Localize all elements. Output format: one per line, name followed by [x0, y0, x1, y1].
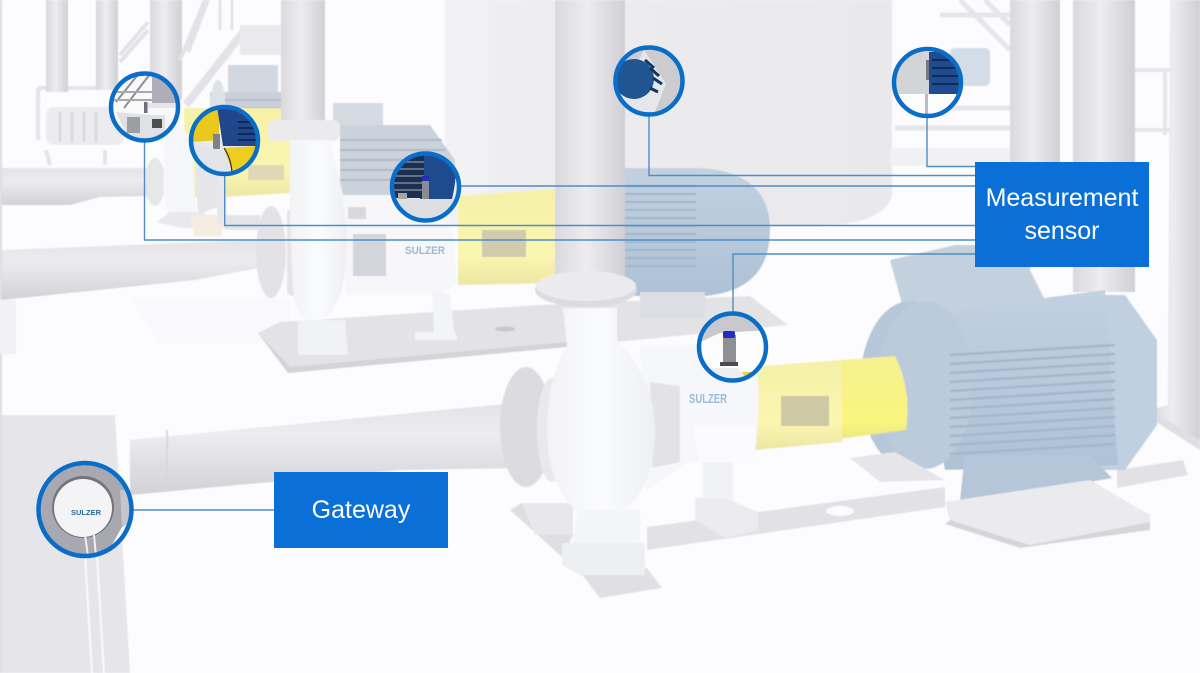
front suction flange: [500, 367, 552, 487]
label: gateway: [274, 472, 448, 548]
rear stairs: [120, 0, 290, 105]
gateway callout: [40, 465, 130, 554]
rear multi-stage pump and frame: [38, 88, 175, 165]
center column pipe: [555, 0, 625, 282]
gateway callout: SULZER: [71, 508, 102, 517]
sensor callout: tank motor right: [896, 52, 959, 114]
front bearing stand: [703, 462, 733, 503]
sensor callout: tank motor front: [618, 50, 680, 112]
label: measurement sensor: [975, 162, 1149, 267]
rear coupling guard: [184, 108, 290, 198]
second pump housing: [345, 195, 456, 295]
sensor callout: rear left motor: [193, 109, 256, 172]
connector lines to measurement sensor: [132, 116, 975, 510]
sensor callout: second pump: [394, 156, 456, 218]
second long pipe: [2, 240, 258, 300]
front pump bearing frame: [640, 345, 758, 490]
SULZER mark on second pump: SULZER: [405, 245, 445, 257]
front motor plates: [850, 452, 945, 482]
second volute: [287, 208, 301, 296]
gateway wall box: [2, 415, 130, 673]
front flange: [535, 273, 637, 307]
front volute foot: [572, 510, 640, 548]
second pump base plate: [258, 296, 788, 373]
second column pipe: [281, 0, 325, 125]
front volute: [547, 308, 655, 520]
second motor: [333, 103, 383, 133]
front coupling guard: [750, 356, 908, 450]
SULZER mark on front pump: SULZER: [689, 391, 727, 406]
label: gateway: Gateway: [312, 496, 410, 524]
front motor: [1085, 295, 1157, 470]
second coupling guard: [458, 189, 555, 285]
sensor callout: front pump: [702, 316, 759, 378]
rear motor: [228, 65, 278, 105]
rear pump: [163, 126, 197, 222]
floor blocks: [130, 298, 290, 343]
right stairs and platform: [895, 0, 1200, 135]
sensor callout rings: [38, 48, 961, 556]
label: measurement sensor: Measurement: [986, 184, 1138, 212]
sensor callout: rear left pump: [114, 76, 176, 138]
tank: [445, 0, 892, 226]
rear pipe: [2, 168, 150, 205]
front pipe: [130, 403, 515, 495]
label: measurement sensor: sensor: [1024, 216, 1100, 244]
front base plate: [510, 503, 573, 557]
